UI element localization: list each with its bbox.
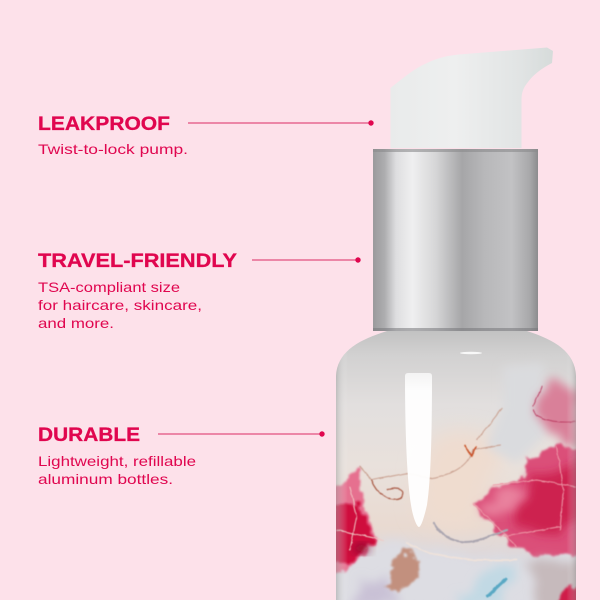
marble crimson right xyxy=(510,460,583,537)
marble peach wash xyxy=(430,434,497,492)
text: durable description: Lightweight, refillable xyxy=(38,453,196,469)
small shoulder highlight xyxy=(460,352,482,354)
marble violet lower left xyxy=(352,576,400,600)
marble grey veil xyxy=(489,369,541,460)
leader line: travel-friendly xyxy=(252,257,361,263)
marble bottle xyxy=(323,328,583,600)
leader line: durable xyxy=(158,431,325,437)
marble veins xyxy=(337,387,575,560)
text: travel-friendly description: and more. xyxy=(38,315,114,331)
marble deep red left xyxy=(330,502,375,565)
callout: durable xyxy=(38,424,325,487)
callout: travel-friendly xyxy=(38,250,361,331)
marble blue streak xyxy=(487,578,507,597)
marble light pink patch xyxy=(480,490,527,517)
marble lower grey field xyxy=(372,542,420,556)
text: durable description xyxy=(38,453,196,487)
heading: durable: DURABLE xyxy=(38,424,140,446)
leader line: leakproof xyxy=(188,120,374,126)
text: leakproof description: Twist-to-lock pump. xyxy=(38,141,188,157)
marble blue lower xyxy=(460,562,520,600)
marble grey lower right xyxy=(530,557,583,600)
heading: leakproof: LEAKPROOF xyxy=(38,113,170,135)
text: durable description: aluminum bottles. xyxy=(38,471,173,487)
bottle highlight xyxy=(405,373,432,527)
marble pink right xyxy=(472,447,583,555)
silver collar xyxy=(373,149,538,331)
marble dark spot xyxy=(354,544,370,553)
text: travel-friendly description: TSA-compliant size xyxy=(38,279,180,295)
heading: travel-friendly: TRAVEL-FRIENDLY xyxy=(38,250,237,272)
marble pink upper right xyxy=(535,380,580,452)
marble copper flecks xyxy=(387,547,420,593)
marble pale pink left xyxy=(336,466,378,574)
text: travel-friendly description: for haircare, skincare, xyxy=(38,297,202,313)
callout: leakproof xyxy=(38,113,374,157)
bottle pump xyxy=(390,48,553,148)
marble red corner xyxy=(557,583,576,600)
text: travel-friendly description xyxy=(38,279,202,331)
